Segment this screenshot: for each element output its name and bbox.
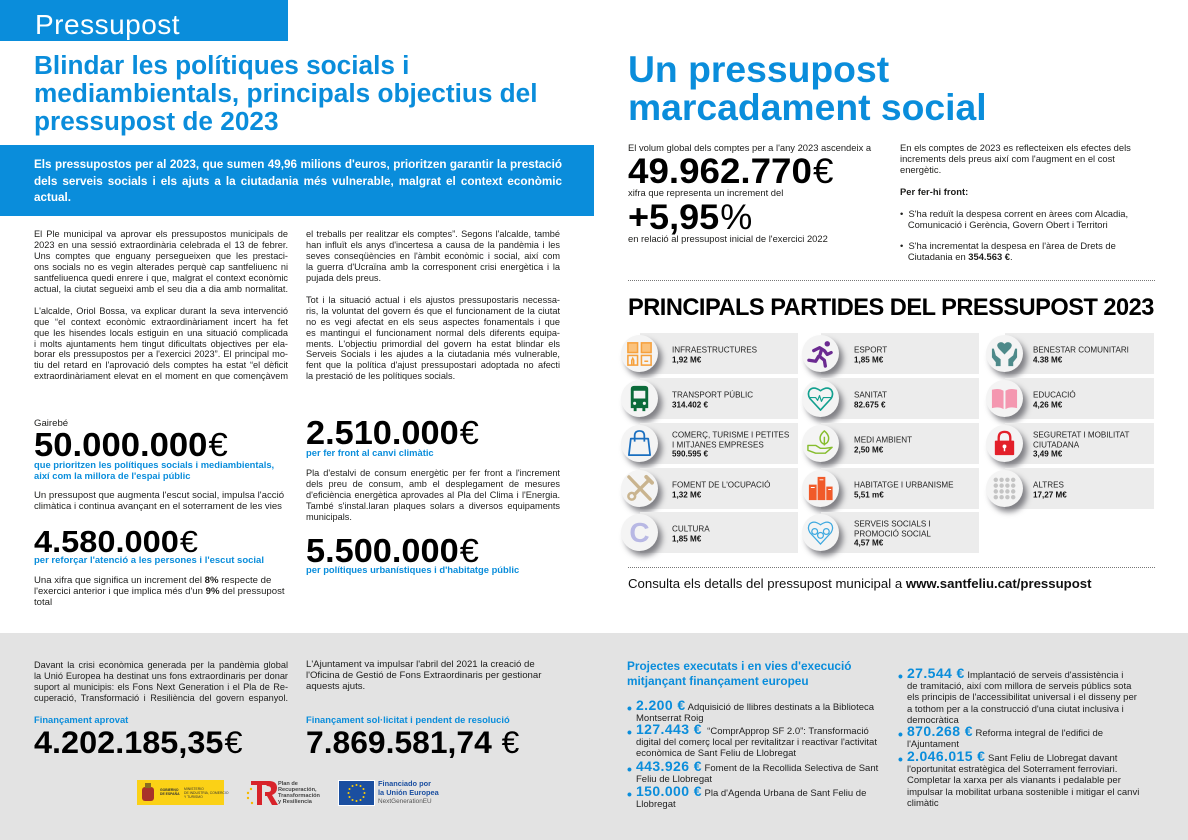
text block: oficina de gestió: l'Oficina de Gestió de Fons Extraordinaris per gestionar: [306, 670, 541, 681]
list: projects column 2: Completar la xarxa per als vianants i pedalable per: [907, 775, 1121, 786]
figure: 50.000.000 euros: [34, 418, 274, 481]
logo: Gobierno de España: Y TURISMO: [184, 795, 203, 799]
list: projects column 2: 27.544 € Implantació de serveis d'assistència i: [907, 665, 1123, 681]
heading: right main title: Un pressupost: [628, 48, 889, 90]
stat block: global volume: en relació al pressupost inicial de l'exercici 2022: [628, 233, 828, 244]
list: projects column 1: econòmica de Sant Feliu de Llobregat: [636, 748, 796, 759]
logo: Plan de Recuperación: Transformación: [278, 793, 320, 799]
section tab: Pressupost: [0, 0, 288, 41]
text block: EU funds: [34, 660, 288, 703]
logo: Gobierno de España: DE ESPAÑA: [160, 792, 180, 796]
text block: article column 2: han influït els anys d'incertesa a causa de la pandèmia i les: [306, 240, 560, 250]
text block: escut social: climàtica i continua avançant en el soterrament de les vies: [34, 501, 282, 512]
text block: article column 1: 2023 en una sessió extraordinària celebrada el 13 de febrer.: [34, 240, 288, 250]
budget card: altres: ALTRES: [1033, 481, 1064, 490]
stat block: global volume: [628, 142, 872, 244]
link: pressupost details: Consulta els detalls del pressupost municipal a www.santfeliu.cat/pressupost: [628, 576, 1091, 591]
stat block: global volume: +5,95%: [628, 198, 752, 237]
heading: right main title: [628, 48, 987, 128]
text block: price effects: Ciutadania en 354.563 €.: [908, 251, 1013, 262]
budget card: foment de l'ocupació: 1,32 M€: [672, 490, 701, 499]
text block: article column 2: Tot i la situació actual i els ajustos pressupostaris necessa-: [306, 295, 560, 305]
banner text: dels serveis socials i els ajuts a la ciutadania més vulnerable, malgrat el context econòmic: [34, 175, 562, 188]
budget card: foment de l'ocupació: [640, 468, 798, 509]
list: projects column 2: •: [898, 751, 903, 767]
stat block: global volume: El volum global dels comptes per a l'any 2023 ascendeix a: [628, 142, 871, 153]
logo: Gobierno de España: MINISTERIO: [184, 787, 204, 791]
budget card: serveis socials: PROMOCIÓ SOCIAL: [854, 529, 931, 538]
list: projects column 2: de tramitació, així com millora de serveis públics sota: [907, 681, 1131, 692]
text block: article column 1: El Ple municipal va aprovar els pressupostos municipals de: [34, 229, 288, 239]
logo: European Union: la Unión Europea: [378, 788, 439, 797]
text block: article column 1: tiu del retard en l'aprovació dels comptes ha estat “el dèficit: [34, 360, 288, 370]
text block: EU funds: la Unió Europea ha destinat uns fons extraordinaris per donar: [34, 671, 288, 681]
logo: European Union: [338, 779, 439, 806]
logo: Plan de Recuperación: Plan de: [278, 781, 298, 787]
text block: estalvi energètic: També s'instal.laran plaques solars a diversos equipaments: [306, 501, 560, 511]
budget card: esport: [821, 333, 979, 374]
budget card: esport: ESPORT: [854, 346, 887, 355]
text block: article column 1: que les hisendes locals estiguin en una situació complicada: [34, 328, 288, 338]
budget card: sanitat: [821, 378, 979, 419]
logo: Plan de Recuperación: y Resiliencia: [278, 799, 312, 805]
list: projects column 2: l'oportunitat estratègica del Soterrament ferroviari.: [907, 764, 1117, 775]
heading: projects: mitjançant finançament europeu: [627, 674, 809, 688]
list: projects column 1: Feliu de Llobregat: [636, 774, 712, 785]
text block: estalvi energètic: dels preu de consum, amb el desplegament de mesures: [306, 479, 560, 489]
budget card: benestar comunitari: BENESTAR COMUNITARI: [1033, 346, 1129, 355]
list: projects column 2: a tothom per a la construcció d'una ciutat inclusiva i: [907, 704, 1124, 715]
budget card: comerç: [640, 423, 798, 464]
figure: approved funding: Finançament aprovat: [34, 714, 128, 725]
text block: oficina de gestió: L'Ajuntament va impulsar l'abril del 2021 la creació de: [306, 659, 535, 670]
text block: article column 2: la guerra d'Ucraïna amb la corresponent crisi energètica i la: [306, 262, 560, 272]
list: projects column 1: Llobregat: [636, 799, 676, 810]
text block: article column 1: ons socials no es vegin alterades perquè cap santfeliuenc ni: [34, 262, 288, 272]
list: projects column 2: impulsar la mobilitat urbana sostenible i mitigar el canvi: [907, 787, 1139, 798]
figure: 5.500.000 euros: [306, 532, 519, 575]
stat block: global volume: xifra que representa un increment del: [628, 187, 783, 198]
budget card: benestar comunitari: 4.38 M€: [1033, 355, 1062, 364]
text block: price effects: Per fer-hi front:: [900, 186, 968, 197]
figure: 50.000.000 euros: que prioritzen les polítiques socials i mediambientals,: [34, 459, 274, 470]
logo: Plan de Recuperación: Recuperación,: [278, 787, 317, 793]
heading: left main title: Blindar les polítiques socials i: [34, 50, 409, 80]
heading: principals partides: PRINCIPALS PARTIDES DEL PRESSUPOST 2023: [628, 295, 1154, 321]
banner text: actual.: [34, 191, 71, 204]
text block: price effects: energètic.: [900, 164, 941, 175]
heading: left main title: pressupost de 2023: [34, 106, 279, 136]
budget card: seguretat: 3,49 M€: [1033, 450, 1062, 459]
figure: 4.580.000 euros: [34, 524, 264, 566]
text block: estalvi energètic: d'eficiència energètica aprovades al Pla del Clima i l'Energia.: [306, 490, 560, 500]
budget card: comerç: 590.595 €: [672, 450, 708, 459]
budget card: medi ambient: [821, 423, 979, 464]
budget card: medi ambient: MEDI AMBIENT: [854, 436, 912, 445]
heading: left main title: [34, 50, 538, 136]
banner text: Els pressupostos per al 2023, que sumen 49,96 milions d'euros, prioritzen garantir la prestació: [34, 158, 562, 171]
figure: approved funding: 4.202.185,35€: [34, 724, 243, 760]
heading: projects: [627, 659, 851, 688]
text block: article column 2: la prestació de les polítiques socials.: [306, 371, 455, 381]
figure: 50.000.000 euros: 50.000.000€: [34, 426, 228, 463]
budget card: altres: [1005, 468, 1154, 509]
list: projects column 2: l'Ajuntament: [907, 739, 959, 750]
budget card: seguretat: [1005, 423, 1154, 464]
budget card: educació: [1005, 378, 1154, 419]
budget card: habitatge i urbanisme: 5,51 m€: [854, 490, 884, 499]
budget card: educació: 4,26 M€: [1033, 400, 1062, 409]
budget card: transport públic: [640, 378, 798, 419]
budget card: cultura: [640, 512, 798, 553]
figure: 50.000.000 euros: així com la millora de l'espai públic: [34, 470, 190, 481]
text block: estalvi energètic: municipals.: [306, 512, 352, 522]
list: projects column 1: •: [627, 724, 632, 740]
logo: Gobierno de España: GOBIERNO: [160, 788, 178, 792]
text block: article column 1: extraordinàriament elevat en el moment en que començàvem: [34, 371, 288, 381]
list: projects column 1: 2.200 € Adquisició de llibres destinats a la Biblioteca: [636, 697, 874, 713]
budget card: habitatge i urbanisme: [821, 468, 979, 509]
list: projects column 1: 150.000 € Pla d'Agenda Urbana de Sant Feliu de: [636, 783, 866, 799]
text block: article column 2: seves conseqüències en l'àmbit econòmic i social, així com: [306, 251, 560, 261]
list: projects column 2: 2.046.015 € Sant Feliu de Llobregat davant: [907, 748, 1117, 764]
budget card: foment de l'ocupació: FOMENT DE L'OCUPACIÓ: [672, 481, 770, 490]
text block: increment: l'exercici anterior i que implica més d'un 9% del pressupost: [34, 586, 285, 597]
banner: intro summary: [0, 145, 594, 216]
budget card: comerç: I MITJANES EMPRESES: [672, 440, 764, 449]
figure: 4.580.000 euros: 4.580.000€: [34, 524, 198, 559]
budget card: serveis socials: [821, 512, 979, 553]
text block: oficina de gestió: aquests ajuts.: [306, 681, 365, 692]
text block: article column 1: actual, la ciutat segueixi amb el seu dia a dia amb normalitat.: [34, 284, 288, 294]
logo: Gobierno de España: [137, 780, 224, 805]
budget card: transport públic: TRANSPORT PÚBLIC: [672, 391, 753, 400]
figure: requested funding: 7.869.581,74 €: [306, 724, 519, 760]
budget card: medi ambient: 2,50 M€: [854, 445, 883, 454]
text block: article column 1: L'alcalde, Oriol Bossa, va explicar durant la seva intervenció: [34, 306, 288, 316]
list: projects column 2: els principis de l'accessibilitat universal i el disseny per: [907, 692, 1137, 703]
text block: article column 1: i molts ajuntaments hem tingut dificultats objectives per ela-: [34, 339, 288, 349]
text block: article column 2: fent que la política d'ajust pressupostari adoptada no afecti: [306, 360, 560, 370]
budget card: infraestructures: INFRAESTRUCTURES: [672, 346, 757, 355]
budget card: seguretat: CIUTADANA: [1033, 440, 1079, 449]
text block: article column 2: no es vegi afectat en els seus aspectes fonamentals i que: [306, 317, 560, 327]
text block: price effects: [900, 142, 1131, 262]
list: projects column 1: •: [627, 786, 632, 802]
text block: oficina de gestió: [306, 659, 542, 692]
stat block: global volume: 49.962.770€: [628, 152, 833, 191]
text block: article column 1: Uns comptes que enguany persegueixen que les prestaci-: [34, 251, 288, 261]
text block: article column 1: que “el context econòmic extraordinàriament incert ha fet: [34, 317, 288, 327]
text block: article column 2: es mantingui el funcionament normal dels diferents equipa-: [306, 328, 560, 338]
budget card: transport públic: 314.402 €: [672, 400, 708, 409]
text block: escut social: Un pressupost que augmenta l'escut social, impulsa l'acció: [34, 490, 284, 501]
budget card: altres: 17,27 M€: [1033, 490, 1067, 499]
text block: article column 2: el treballs per realitzar els comptes”. Segons l'alcalde, també: [306, 229, 560, 239]
text block: increment: Una xifra que significa un increment del 8% respecte de: [34, 575, 271, 586]
list: projects column 2: 870.268 € Reforma integral de l'edifici de: [907, 723, 1103, 739]
budget card: habitatge i urbanisme: HABITATGE I URBANISME: [854, 481, 954, 490]
text block: price effects: • S'ha reduït la despesa corrent en àrees com Alcadia,: [900, 208, 1128, 219]
list: projects column 1: digital del comerç local per revitalitzar i reactivar l'activitat: [636, 737, 877, 748]
budget card: seguretat: SEGURETAT I MOBILITAT: [1033, 431, 1129, 440]
heading: left main title: mediambientals, principals objectius del: [34, 78, 538, 108]
list: projects column 1: •: [627, 700, 632, 716]
logo: European Union: NextGenerationEU: [378, 798, 432, 805]
budget card: serveis socials: 4,57 M€: [854, 539, 883, 548]
list: projects column 2: democràtica: [907, 715, 959, 726]
figure: 4.580.000 euros: per reforçar l'atenció a les persones i l'escut social: [34, 555, 264, 566]
list: projects column 2: •: [898, 668, 903, 684]
budget card: infraestructures: 1,92 M€: [672, 355, 701, 364]
text block: article column 1: santfeliuenca quedi enrere i que, malgrat el context econòmic: [34, 273, 288, 283]
budget card: sanitat: 82.675 €: [854, 400, 886, 409]
list: projects column 1: •: [627, 761, 632, 777]
text block: article column 2: Serveis Socials i les ajudes a la ciutadania més vulnerable,: [306, 349, 560, 359]
footer panel: European funding: [0, 633, 1188, 840]
logo: European Union: Financiado por: [378, 779, 431, 788]
figure: 2.510.000 euros: per fer front al canvi climàtic: [306, 447, 434, 458]
list: projects column 1: 443.926 € Foment de la Recollida Selectiva de Sant: [636, 758, 878, 774]
budget card: cultura: 1,85 M€: [672, 534, 701, 543]
text block: estalvi energètic: [306, 468, 560, 522]
text block: article column 1: [34, 229, 288, 381]
logo: Plan de Recuperación: [246, 781, 320, 805]
text block: increment: [34, 575, 285, 608]
figure: 5.500.000 euros: 5.500.000€: [306, 532, 479, 569]
text block: increment: total: [34, 597, 52, 608]
budget card: comerç: COMERÇ, TURISME I PETITES: [672, 431, 789, 440]
text block: EU funds: cuperació, Transformació i Resiliència del govern espanyol.: [34, 693, 288, 703]
budget card: sanitat: SANITAT: [854, 391, 887, 400]
text block: estalvi energètic: Pla d'estalvi de consum energètic per fer front a l'increment: [306, 468, 560, 478]
text block: article column 2: pujada dels preus.: [306, 273, 381, 283]
budget card: infraestructures: [640, 333, 798, 374]
budget card: serveis socials: SERVEIS SOCIALS I: [854, 520, 931, 529]
logo: Gobierno de España: DE INDUSTRIA, COMERCIO: [184, 791, 228, 795]
figure: 50.000.000 euros: Gairebé: [34, 418, 68, 429]
text block: EU funds: Davant la crisi econòmica generada per la pandèmia global: [34, 660, 288, 670]
heading: right main title: marcadament social: [628, 86, 987, 128]
section tab: Pressupost: Pressupost: [35, 9, 180, 40]
heading: projects: Projectes executats i en vies d'execució: [627, 659, 851, 673]
text block: article column 2: ris, la voluntat del govern és que el funcionament de la ciutat: [306, 306, 560, 316]
list: projects column 1: 127.443 € “ComprApprop SF 2.0”: Transformació: [636, 721, 869, 737]
list: projects column 2: climàtic: [907, 798, 939, 809]
figure: 5.500.000 euros: per polítiques urbanístiques i d'habitatge públic: [306, 564, 519, 575]
list: projects column 2: [898, 665, 1139, 809]
text block: article column 1: borar els pressupostos per a l'exercici 2023”. El principal mo-: [34, 349, 288, 359]
text block: price effects: • S'ha incrementat la despesa en l'àrea de Drets de: [900, 240, 1116, 251]
text block: escut social: [34, 490, 284, 512]
figure: 2.510.000 euros: 2.510.000€: [306, 414, 479, 451]
text block: article column 2: ments. L'objectiu primordial del govern ha estat blindar els: [306, 339, 560, 349]
banner text: [34, 158, 562, 204]
text block: article column 2: [306, 229, 560, 381]
text block: EU funds: suport al municipis: els Fons Next Generation i el Pla de Re-: [34, 682, 288, 692]
figure: requested funding: Finançament sol·licitat i pendent de resolució: [306, 714, 510, 725]
budget card: cultura: CULTURA: [672, 525, 710, 534]
budget card: benestar comunitari: [1005, 333, 1154, 374]
budget card: educació: EDUCACIÓ: [1033, 391, 1076, 400]
list: projects column 1: [627, 697, 878, 810]
budget card: esport: 1,85 M€: [854, 355, 883, 364]
text block: price effects: Comunicació i Gerència, Govern Obert i Territori: [908, 219, 1108, 230]
text block: price effects: increments dels preus així com l'augment en el cost: [900, 153, 1115, 164]
text block: price effects: En els comptes de 2023 es reflecteixen els efectes dels: [900, 142, 1131, 153]
list: projects column 1: Montserrat Roig: [636, 713, 704, 724]
list: projects column 2: •: [898, 726, 903, 742]
